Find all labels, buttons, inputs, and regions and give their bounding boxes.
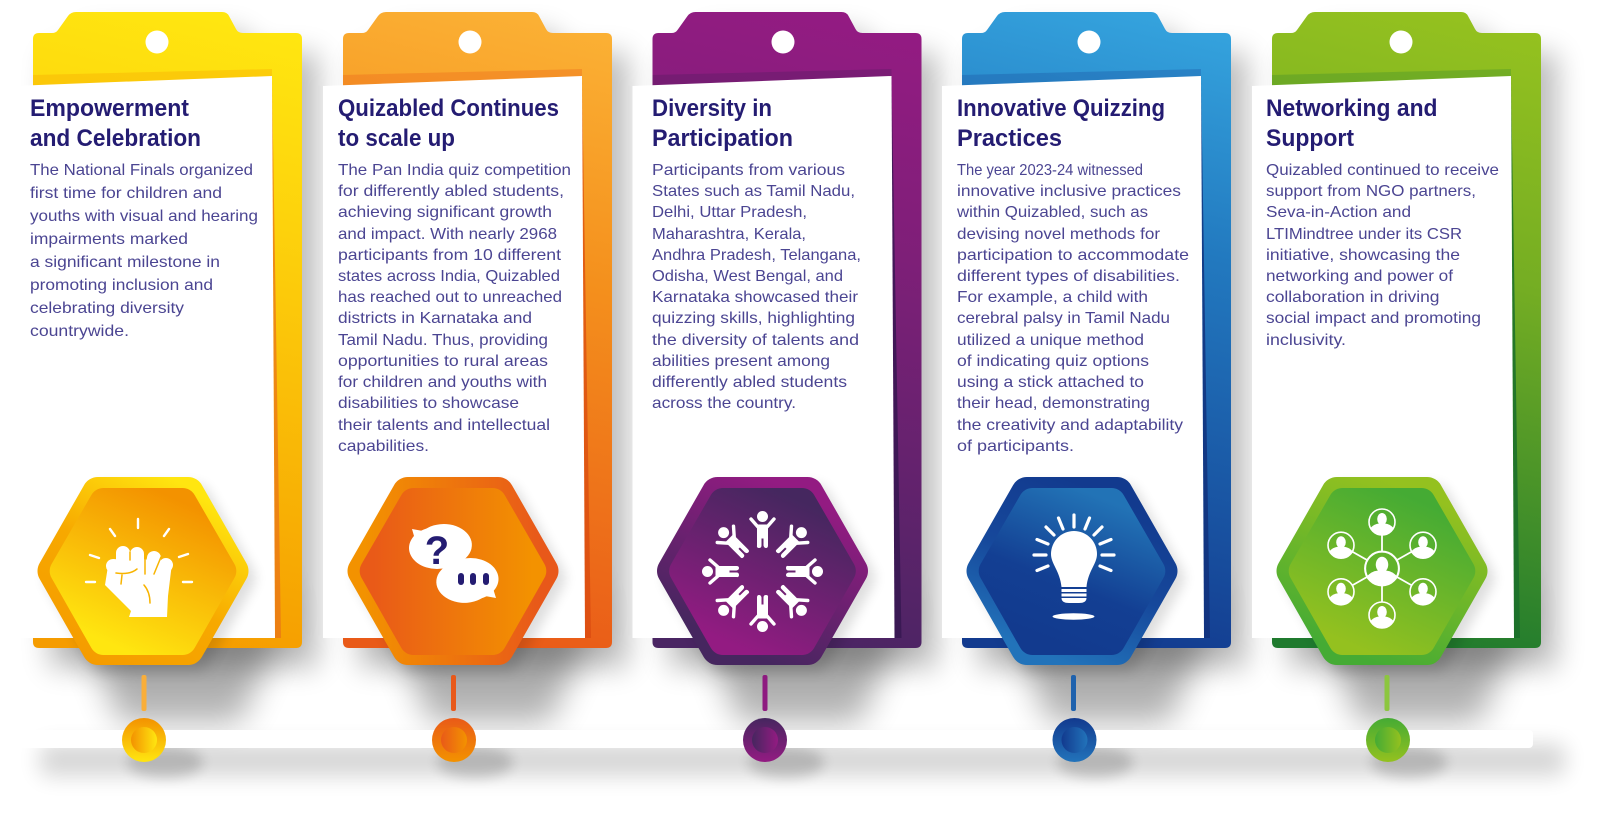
body text: capabilities.	[338, 438, 429, 455]
body text: participation to accommodate	[957, 247, 1189, 264]
hanging hole	[458, 30, 482, 54]
panel: Empowerment and Celebration	[13, 12, 318, 722]
clipboard card	[652, 12, 922, 648]
body text: within Quizabled, such as	[956, 204, 1148, 221]
body text: first time for children and	[30, 185, 222, 202]
heading: Diversity in	[652, 95, 772, 122]
body text: Andhra Pradesh, Telangana,	[652, 247, 861, 264]
white paper	[13, 76, 275, 638]
body text: Participants from various	[652, 162, 845, 179]
body text: for children and youths with	[338, 374, 547, 391]
heading: Empowerment	[30, 95, 189, 122]
icon: speech bubbles	[409, 524, 498, 603]
body text: of participants.	[957, 438, 1074, 455]
body text: of indicating quiz options	[957, 353, 1149, 370]
hexagon shadow	[380, 520, 600, 722]
paper edge wedge	[892, 76, 902, 638]
body text: Seva-in-Action and	[1266, 204, 1411, 221]
card shadow	[978, 32, 1247, 668]
paper edge wedge	[582, 76, 591, 638]
body text: has reached out to unreached	[338, 289, 562, 306]
body text	[652, 162, 861, 412]
body text: and impact. With nearly 2968	[338, 226, 557, 243]
body text	[956, 162, 1189, 455]
body text: opportunities to rural areas	[338, 353, 548, 370]
body text: the creativity and adaptability	[957, 417, 1183, 434]
card shadow	[359, 32, 628, 668]
heading: Practices	[957, 125, 1062, 152]
icon: raised fist	[86, 519, 192, 617]
heading: to scale up	[338, 125, 455, 152]
body text	[1266, 162, 1499, 349]
body text: abilities present among	[652, 353, 830, 370]
hexagon badge	[1292, 493, 1478, 656]
body text: The National Finals organized	[30, 162, 253, 179]
body text: LTIMindtree under its CSR	[1266, 226, 1462, 243]
hanging hole	[1390, 30, 1412, 54]
band above paper	[343, 69, 582, 90]
clipboard card	[962, 12, 1231, 648]
panel: Quizabled Continues to scale up	[323, 12, 628, 722]
body text: achieving significant growth	[338, 204, 552, 221]
heading	[338, 95, 559, 152]
heading	[957, 95, 1165, 152]
body text: countrywide.	[30, 323, 129, 340]
body text: the diversity of talents and	[652, 332, 859, 349]
body text: celebrating diversity	[30, 300, 184, 317]
timeline bar	[19, 730, 1533, 748]
body text: cerebral palsy in Tamil Nadu	[957, 310, 1170, 327]
body text: using a stick attached to	[957, 374, 1144, 391]
body text: their head, demonstrating	[957, 395, 1150, 412]
icon: speech bubbles: ?	[425, 529, 449, 573]
band above paper	[962, 69, 1201, 90]
body text: The year 2023-24 witnessed	[957, 162, 1143, 179]
band above paper	[652, 69, 892, 90]
body text: Maharashtra, Kerala,	[652, 226, 806, 243]
body text: across the country.	[652, 395, 796, 412]
body text: innovative inclusive practices	[957, 183, 1181, 200]
body text: quizzing skills, highlighting	[652, 310, 855, 327]
timeline dot 2	[432, 718, 476, 762]
panel: Networking and Support	[1252, 12, 1557, 722]
body text: inclusivity.	[1266, 332, 1346, 349]
hexagon badge	[364, 493, 550, 656]
icon: circle of people	[702, 511, 823, 632]
hexagon shadow	[70, 520, 290, 722]
heading	[1266, 95, 1438, 152]
connector 5	[1384, 675, 1390, 711]
body text: States such as Tamil Nadu,	[652, 183, 855, 200]
panel: Innovative Quizzing Practices	[942, 12, 1247, 722]
body text: participants from 10 different	[338, 247, 562, 264]
body text: promoting inclusion and	[30, 277, 213, 294]
hexagon shadow	[690, 520, 910, 722]
connector 1	[142, 675, 146, 711]
white paper	[942, 76, 1204, 638]
hanging hole	[772, 30, 794, 54]
clipboard card	[33, 12, 302, 648]
body text	[30, 162, 258, 340]
heading	[652, 95, 793, 152]
heading: Support	[1266, 125, 1354, 152]
hexagon shadow	[1309, 520, 1529, 722]
connector 4	[1071, 675, 1076, 711]
clipboard card	[343, 12, 612, 648]
white paper	[1252, 76, 1514, 638]
body text: states across India, Quizabled	[338, 268, 560, 285]
heading: Innovative Quizzing	[957, 95, 1165, 122]
body text	[338, 162, 571, 455]
body text: a significant milestone in	[30, 254, 220, 271]
body text: social impact and promoting	[1266, 310, 1481, 327]
body text: support from NGO partners,	[1266, 183, 1476, 200]
connector 2	[451, 675, 456, 711]
heading: Networking and	[1266, 95, 1438, 122]
body text: differently abled students	[652, 374, 847, 391]
timeline dot 4	[1052, 718, 1096, 762]
body text: Delhi, Uttar Pradesh,	[652, 204, 807, 221]
icon: light bulb	[1034, 515, 1114, 620]
body text: Tamil Nadu. Thus, providing	[338, 332, 548, 349]
body text: initiative, showcasing the	[1266, 247, 1460, 264]
heading	[30, 95, 201, 152]
body text: Karnataka showcased their	[652, 289, 859, 306]
timeline dot 1	[122, 718, 166, 762]
paper edge wedge	[1201, 76, 1210, 638]
connector 3	[762, 675, 768, 711]
paper edge wedge	[1511, 76, 1520, 638]
panel: Diversity in Participation	[632, 12, 938, 722]
white paper	[323, 76, 585, 638]
body text: devising novel methods for	[957, 226, 1161, 243]
hanging hole	[146, 30, 168, 54]
dot shadows	[127, 746, 1447, 778]
body text: different types of disabilities.	[957, 268, 1180, 285]
heading: and Celebration	[30, 125, 201, 152]
card shadow	[668, 32, 938, 668]
body text: Odisha, West Bengal, and	[652, 268, 843, 285]
card shadow	[1288, 32, 1557, 668]
body text: their talents and intellectual	[338, 417, 550, 434]
body text: For example, a child with	[957, 289, 1148, 306]
hanging hole	[1078, 30, 1100, 54]
white paper	[632, 76, 894, 638]
timeline dot 5	[1366, 718, 1410, 762]
card shadow	[49, 32, 318, 668]
heading: Participation	[652, 125, 793, 152]
body text: Quizabled continued to receive	[1266, 162, 1499, 179]
body text: impairments marked	[30, 231, 188, 248]
body text: disabilities to showcase	[338, 395, 519, 412]
timeline shadow	[40, 744, 1565, 776]
heading: Quizabled Continues	[338, 95, 559, 122]
body text: youths with visual and hearing	[30, 208, 258, 225]
hexagon badge	[54, 493, 240, 656]
band above paper	[1272, 69, 1511, 90]
timeline dot 3	[743, 718, 787, 762]
hexagon badge	[673, 493, 859, 656]
body text: collaboration in driving	[1266, 289, 1440, 306]
clipboard card	[1272, 12, 1541, 648]
body text: utilized a unique method	[957, 332, 1144, 349]
body text: The Pan India quiz competition	[338, 162, 571, 179]
body text: networking and power of	[1266, 268, 1454, 285]
hexagon shadow	[999, 520, 1219, 722]
body text: for differently abled students,	[338, 183, 564, 200]
body text: districts in Karnataka and	[338, 310, 532, 327]
hexagon badge	[982, 493, 1168, 656]
icon: people network	[1328, 509, 1436, 628]
paper edge wedge	[272, 76, 281, 638]
band above paper	[33, 69, 272, 90]
